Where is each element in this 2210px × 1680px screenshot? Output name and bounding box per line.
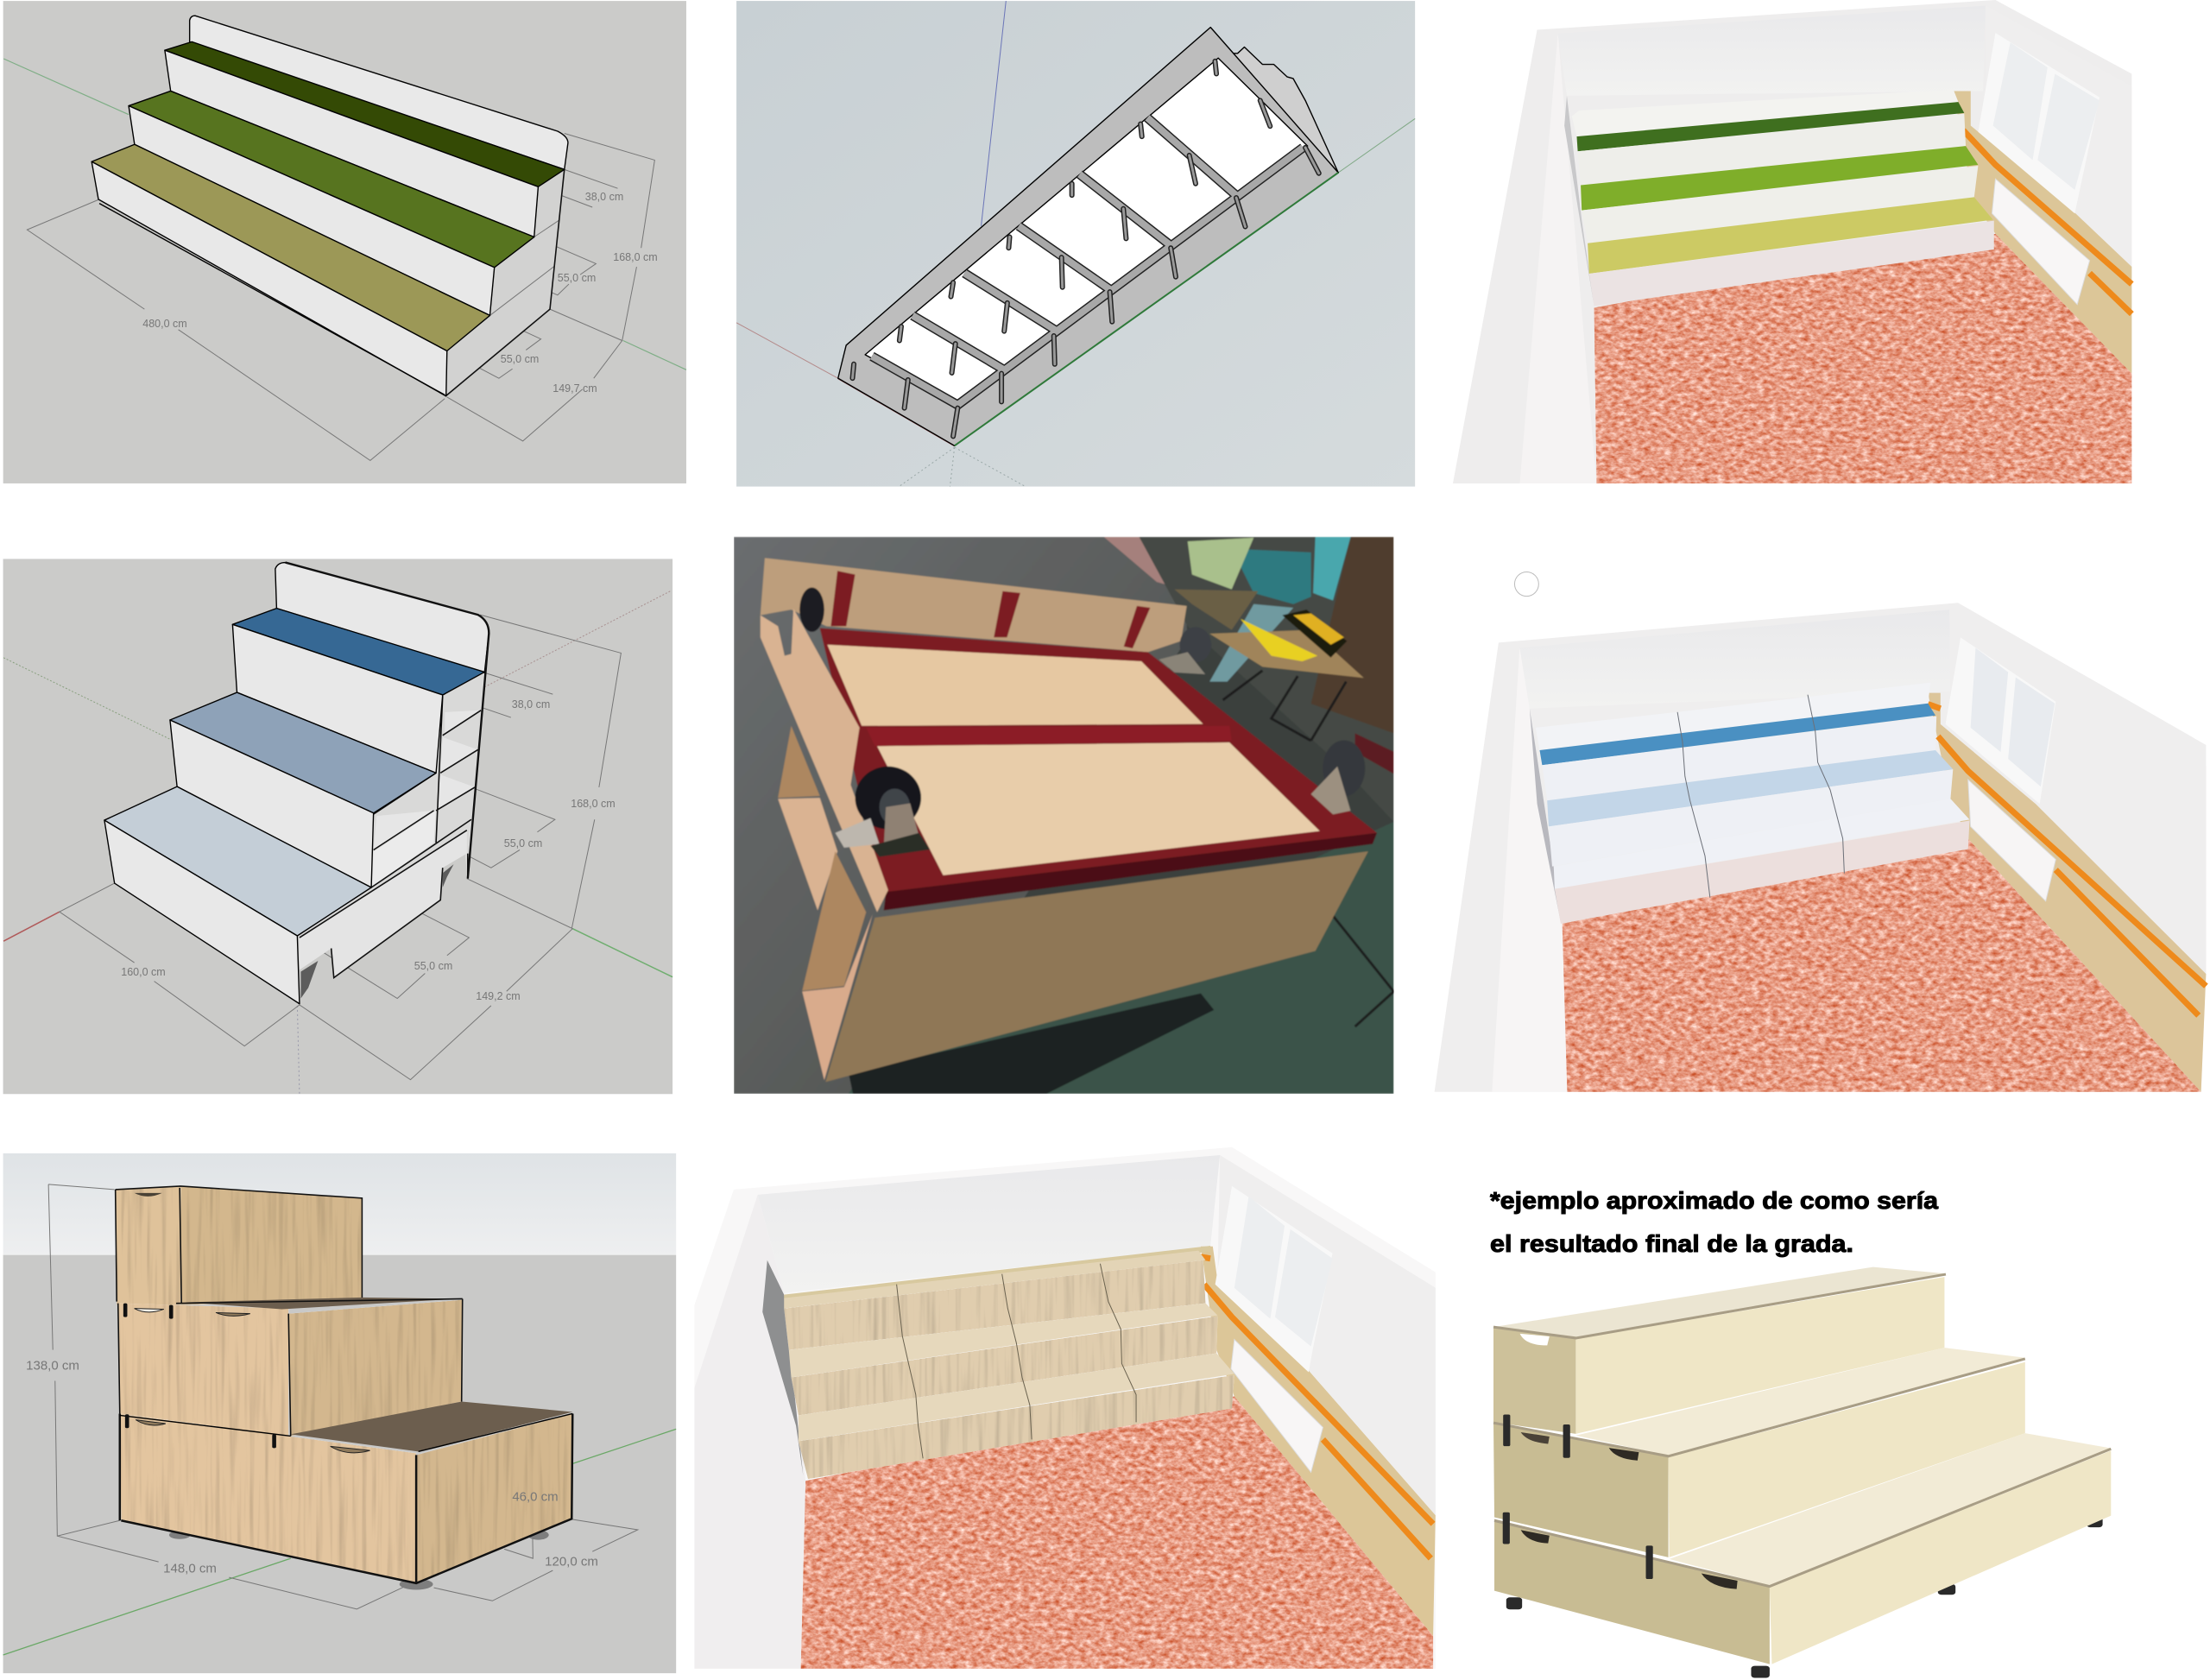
dimension labels: 168,0 cm: [571, 798, 616, 810]
window: [1946, 637, 2055, 804]
middle step: [170, 692, 436, 813]
wooden stand photo: [1493, 1267, 2111, 1677]
dimension labels: 480,0 cm: [142, 318, 187, 330]
panel: green three-step stand 3D model: [3, 1, 686, 483]
workshop background: [1140, 537, 1393, 822]
dimension labels: 120,0 cm: [545, 1554, 598, 1569]
radiator: [1992, 179, 2090, 305]
middle block: [118, 1304, 288, 1436]
dimension lines: [27, 134, 654, 460]
dimension labels: 38,0 cm: [512, 698, 550, 711]
handles: [1520, 1334, 1550, 1345]
dimension labels: 168,0 cm: [613, 251, 658, 263]
carpet floor: [1563, 838, 2201, 1092]
panel: photo of upturned stand with castors: [734, 537, 1393, 1094]
side shelving: [297, 673, 484, 977]
wainscot: [1201, 1247, 1436, 1636]
stand: [1530, 709, 1561, 922]
stepped profile: [1217, 47, 1338, 173]
red steel frame: [820, 628, 1377, 895]
window: [1216, 1186, 1333, 1373]
carpet floor: [1594, 234, 2131, 483]
panel: room render with blue modular stand: [1435, 572, 2206, 1092]
dimension labels: 46,0 cm: [512, 1490, 559, 1504]
dimension labels: 55,0 cm: [414, 960, 452, 972]
caption: el resultado final de la grada.: [1490, 1230, 1853, 1257]
side profile: [445, 169, 565, 396]
small circle mark: [1514, 572, 1538, 597]
panel: blue stand 3D model: [3, 559, 672, 1094]
top step: [165, 41, 565, 186]
caption: *ejemplo aproximado de como sería: [1490, 1187, 1938, 1214]
stand: [1564, 96, 1594, 306]
dimension labels: [142, 191, 658, 395]
dimension labels: [26, 1359, 598, 1576]
dimension labels: 55,0 cm: [558, 272, 596, 284]
door sliver: [762, 1260, 803, 1475]
top step: [232, 609, 484, 695]
dimension labels: 148,0 cm: [163, 1561, 217, 1576]
dimension labels: 55,0 cm: [504, 837, 542, 849]
dimension labels: 38,0 cm: [585, 191, 623, 203]
dimension labels: 55,0 cm: [501, 353, 539, 365]
dimension lines: [60, 615, 621, 1080]
panel: room render with wooden modular stand: [694, 1147, 1436, 1669]
backboard: [190, 16, 568, 169]
bottom block: [120, 1413, 416, 1584]
left side panel: [761, 609, 888, 913]
middle tier: [1575, 1348, 2025, 1456]
panel: underside frame 3D model: [736, 1, 1415, 487]
handles and latches: [123, 1193, 370, 1453]
caption: [1490, 1187, 1938, 1257]
wainscot: [1954, 91, 2131, 374]
dimension labels: 149,7 cm: [552, 382, 597, 395]
dimension labels: 149,2 cm: [476, 990, 521, 1002]
shelves at side: [778, 726, 820, 798]
wheels: [1506, 1514, 2103, 1677]
dimension labels: 138,0 cm: [26, 1359, 79, 1373]
window: [1978, 33, 2100, 213]
dimension labels: [121, 698, 616, 1002]
castors: [169, 1531, 190, 1539]
top block: [116, 1186, 180, 1305]
radiator: [1231, 1340, 1323, 1472]
carpet floor: [801, 1396, 1433, 1669]
stand: [784, 1246, 1210, 1298]
dimension labels: 160,0 cm: [121, 966, 166, 978]
front board: [825, 851, 1368, 1082]
panel: room render with green stand: [1453, 0, 2131, 483]
backboard: [275, 563, 489, 673]
latches: [1503, 1414, 1653, 1579]
top tier: [1493, 1267, 1946, 1337]
plywood panels: [827, 645, 1203, 726]
back board: [761, 558, 1187, 652]
outer frame: [838, 28, 1338, 445]
castors: [799, 588, 1365, 857]
bottom step: [104, 786, 371, 936]
white bays: [865, 58, 1308, 405]
wainscot: [1928, 693, 2206, 1092]
bottom tier: [1670, 1433, 2111, 1586]
bottom step: [92, 144, 489, 351]
middle step: [129, 91, 534, 268]
panel: wooden stand 3D model: [3, 1153, 676, 1673]
support legs: [852, 61, 1319, 436]
dimension lines: [48, 1184, 638, 1609]
panel: final result photo and caption: [1490, 1187, 2111, 1677]
radiator: [1968, 780, 2055, 901]
